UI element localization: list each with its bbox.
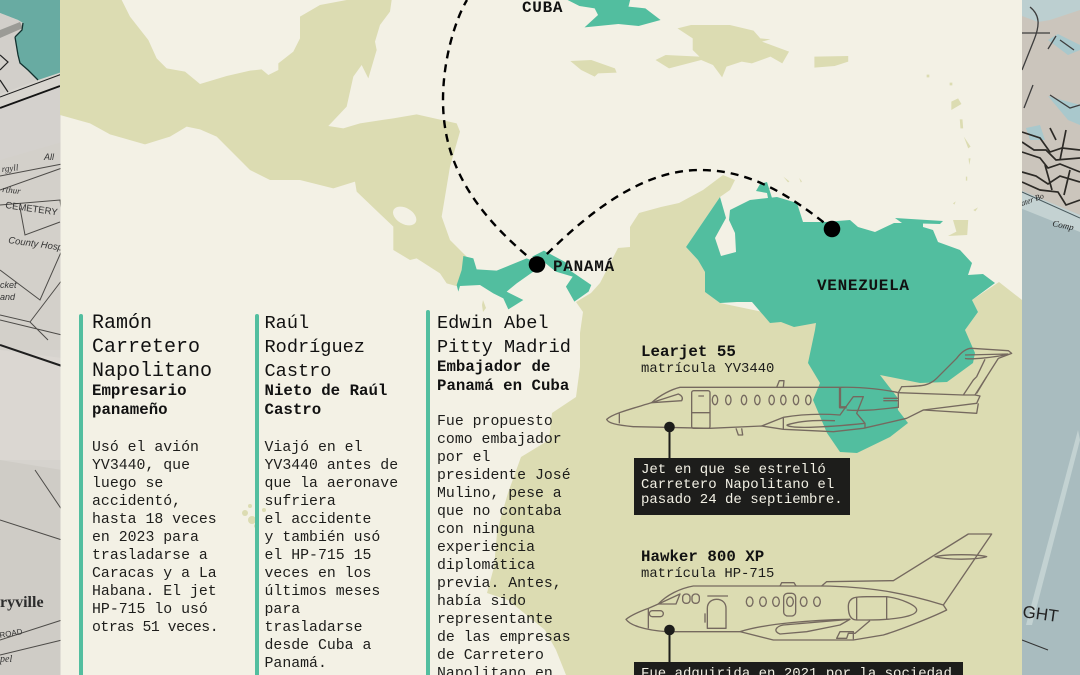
map: Caribbean islands	[570, 25, 978, 236]
map: Venezuela	[686, 182, 995, 453]
subheading: Hawker registration: matrícula HP-715	[641, 566, 774, 582]
background photo: left map strip: All	[43, 152, 55, 162]
background photo: right map strip	[1020, 0, 1080, 675]
pin: Learjet callout	[664, 422, 675, 459]
background photo: left map strip: pel	[0, 654, 12, 665]
background photo: left map strip: County Hosp	[8, 235, 64, 254]
panel: Raúl Rodríguez Castro	[255, 313, 398, 675]
map: South America	[487, 175, 1022, 675]
background photo: right map strip: Comp	[1052, 218, 1075, 233]
biography: Usó el avión YV3440, que luego se accidentó, hasta 18 veces en 2023 para trasladarse a Caracas y a La Habana. El jet HP-715 lo usó otras 51 veces.	[92, 440, 218, 636]
background photo: left map strip: rgyll	[1, 162, 19, 174]
map: Pacific islands	[242, 300, 486, 528]
biography: Viajó en el YV3440 antes de que la aeronave sufriera el accidente y también usó el HP-715 15 veces en los últimos meses para trasladarse desde Cuba a Panamá.	[264, 440, 398, 672]
plane: Hawker 800 XP	[626, 534, 992, 640]
background photo: left map strip	[0, 0, 64, 675]
name: Raúl Rodríguez Castro	[264, 313, 365, 382]
pin: Hawker callout	[664, 625, 675, 663]
accent bar	[426, 310, 430, 675]
accent bar	[255, 314, 259, 675]
panel: Ramón Carretero Napolitano	[79, 312, 218, 675]
flight route: Panama to Venezuela	[537, 170, 832, 264]
heading: Hawker 800 XP: Hawker 800 XP	[641, 548, 764, 566]
background photo: left map strip: rthur	[2, 184, 22, 196]
callout: Hawker	[634, 662, 963, 675]
subheading: Learjet registration: matrícula YV3440	[641, 361, 774, 377]
name: Ramón Carretero Napolitano	[92, 312, 212, 383]
background photo: left map strip: ryville	[0, 594, 44, 611]
biography: Fue propuesto como embajador por el presidente José Mulino, pese a que no contaba con ninguna experiencia diplomática previa. Antes, había sido representante de las empresas de Carretero Napolitano en	[437, 414, 571, 675]
flight route: Panama to Cuba	[443, 0, 537, 264]
heading: Learjet 55: Learjet 55	[641, 343, 736, 361]
marker: Panama	[529, 256, 545, 273]
background photo: right map strip: ater Bo	[1020, 191, 1045, 208]
role: Nieto de Raúl Castro	[264, 382, 387, 419]
marker: Venezuela	[824, 221, 840, 237]
background photo: left map strip: and	[0, 292, 16, 302]
background photo: right map strip: GHT	[1021, 602, 1060, 626]
panel: Edwin Abel Pitty Madrid	[426, 310, 571, 675]
map label: Panama: PANAMÁ	[553, 258, 615, 276]
accent bar	[79, 314, 83, 675]
map: Panama	[457, 251, 591, 309]
plane: Learjet 55	[607, 348, 1012, 435]
background photo: left map strip: cket	[0, 280, 17, 290]
name: Edwin Abel Pitty Madrid	[437, 313, 571, 358]
map: Cuba	[568, 0, 661, 27]
background photo: left map strip: CEMETERY	[5, 200, 59, 218]
role: Embajador de Panamá en Cuba	[437, 358, 569, 395]
map label: Venezuela: VENEZUELA	[817, 277, 910, 295]
role: Empresario panameño	[92, 382, 187, 419]
map: Mexico and Central America	[60, 0, 467, 287]
callout: Learjet: Jet en que se estrelló Carretero Napolitano el pasado 24 de septiembre.	[641, 462, 843, 508]
